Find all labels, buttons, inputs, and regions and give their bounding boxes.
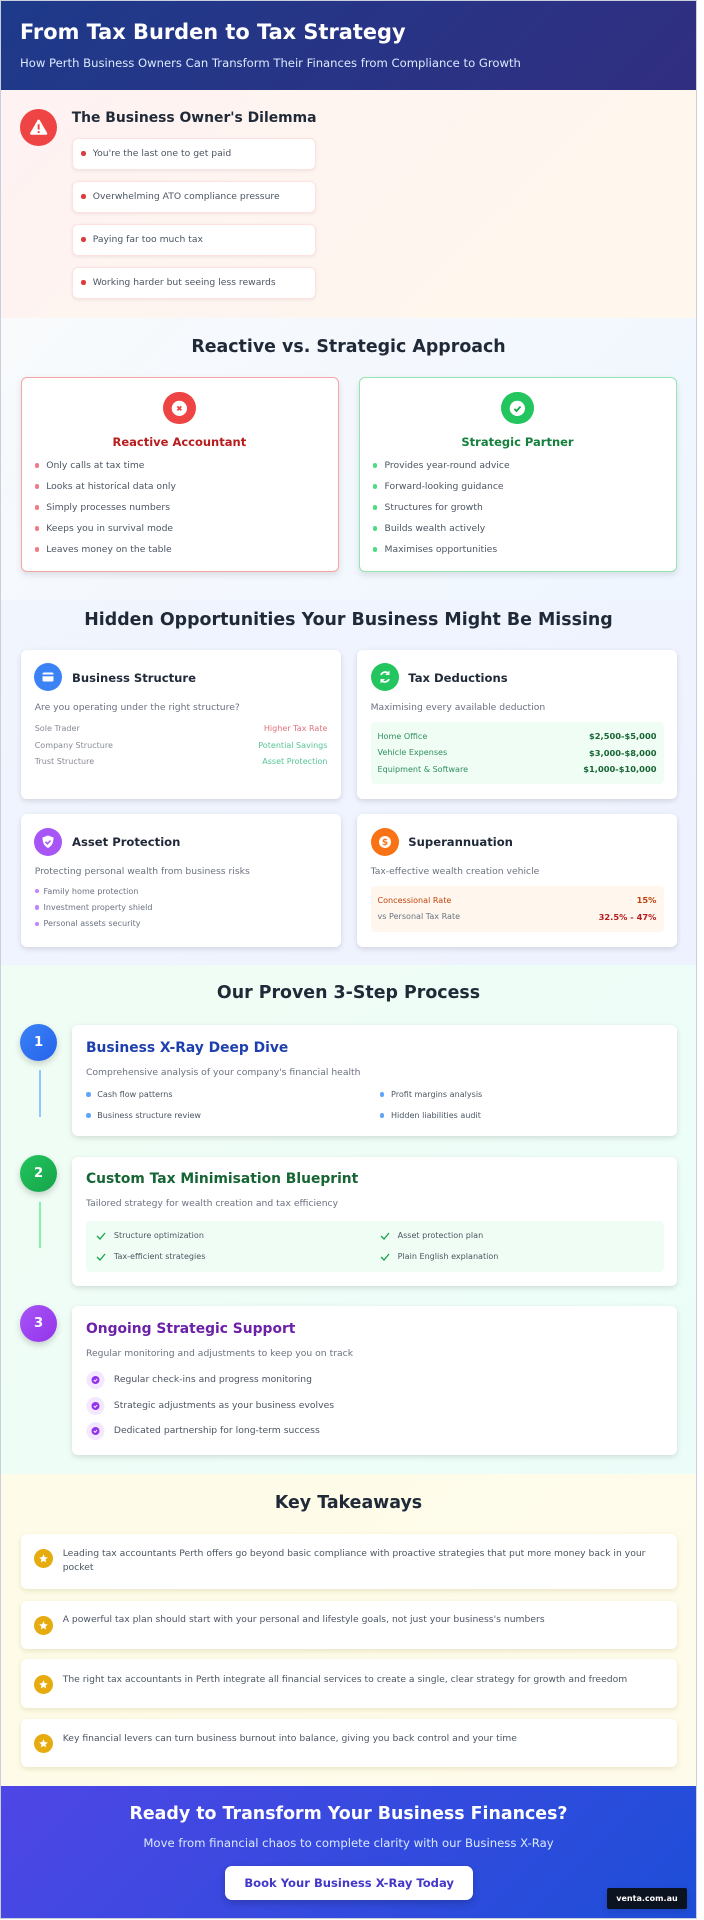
icon: dollar: $	[381, 838, 388, 848]
bullet list: Simply processes numbers	[46, 502, 170, 512]
card: tax deductions	[357, 650, 677, 798]
icon: star	[34, 1734, 53, 1752]
structure rows: Company Structure	[35, 741, 113, 750]
icon: credit card	[34, 663, 62, 691]
structure rows: Higher Tax Rate	[264, 724, 327, 733]
list item	[72, 181, 316, 213]
bullet list	[35, 886, 152, 928]
header banner	[1, 1, 696, 90]
feature list: Business structure review	[97, 1111, 201, 1120]
card: strategic partner	[359, 377, 677, 572]
feature list	[86, 1090, 482, 1120]
description: Tax-effective wealth creation vehicle	[371, 866, 539, 877]
title: From Tax Burden to Tax Strategy	[20, 20, 406, 44]
subtitle: How Perth Business Owners Can Transform Their Finances from Compliance to Growth	[20, 56, 521, 70]
step 2 marker	[20, 1155, 57, 1192]
card: reactive accountant	[21, 377, 339, 572]
bullet list: Builds wealth actively	[384, 522, 485, 534]
rates table: vs Personal Tax Rate	[378, 912, 460, 921]
deductions table: Equipment & Software	[378, 764, 468, 774]
rates table	[371, 886, 664, 932]
bullet list: Provides year-round advice	[384, 460, 510, 470]
takeaway text: Key financial levers can turn business burnout into balance, giving you back control and your time	[63, 1733, 517, 1744]
heading: Hidden Opportunities Your Business Might Be Missing	[84, 610, 613, 630]
structure rows: Trust Structure	[35, 757, 94, 766]
green checklist	[86, 1221, 664, 1272]
rates table: 15%	[637, 895, 656, 905]
deductions table: $2,500-$5,000	[589, 731, 656, 741]
card title: Business Structure	[72, 671, 196, 685]
structure rows: Asset Protection	[262, 757, 327, 766]
heading: Our Proven 3-Step Process	[217, 983, 480, 1003]
heading: The Business Owner's Dilemma	[72, 110, 316, 126]
deductions table	[371, 722, 664, 784]
step 3 marker: 3	[34, 1316, 43, 1331]
takeaway 2	[21, 1600, 677, 1649]
icon: warning triangle	[20, 109, 57, 146]
cta subtext: Move from financial chaos to complete clarity with our Business X-Ray	[143, 1836, 554, 1850]
list item	[72, 267, 316, 299]
rates table: Concessional Rate	[378, 896, 451, 904]
bullet list: Maximises opportunities	[384, 544, 497, 554]
support list: Regular check-ins and progress monitoring	[114, 1374, 312, 1385]
green checklist: Asset protection plan	[398, 1231, 483, 1240]
takeaway text: A powerful tax plan should start with your personal and lifestyle goals, not just your business's numbers	[63, 1614, 545, 1625]
feature list: Profit margins analysis	[391, 1090, 482, 1099]
rates table: 32.5% - 47%	[599, 912, 656, 922]
bullet list: Keeps you in survival mode	[46, 522, 173, 534]
icon: star	[34, 1616, 53, 1635]
bullet list: Leaves money on the table	[46, 544, 172, 554]
step 1 card	[72, 1025, 677, 1136]
list item: Working harder but seeing less rewards	[93, 277, 276, 288]
feature list: Hidden liabilities audit	[391, 1111, 481, 1120]
icon: cross	[163, 392, 196, 424]
step title: Custom Tax Minimisation Blueprint	[86, 1171, 358, 1187]
step 2 connector	[38, 1202, 40, 1248]
support list: Dedicated partnership for long-term success	[114, 1425, 320, 1436]
deductions table: Vehicle Expenses	[378, 748, 447, 757]
deductions table: $1,000-$10,000	[583, 764, 656, 774]
feature list: Cash flow patterns	[97, 1090, 173, 1099]
green checklist: Structure optimization	[114, 1231, 204, 1240]
description: Protecting personal wealth from business risks	[35, 866, 250, 877]
takeaway 4	[21, 1719, 677, 1767]
takeaway 1	[21, 1534, 677, 1589]
bullet list: Forward-looking guidance	[384, 480, 504, 492]
bullet list	[35, 460, 176, 554]
website badge: venta.com.au	[616, 1894, 678, 1903]
cta button: Book Your Business X-Ray Today	[244, 1876, 454, 1890]
card: superannuation	[357, 814, 677, 947]
panel: hidden opportunities	[1, 600, 696, 965]
card title: Strategic Partner	[461, 434, 574, 448]
icon: star	[34, 1674, 53, 1694]
step description: Tailored strategy for wealth creation and tax efficiency	[86, 1198, 338, 1209]
panel: reactive vs strategic	[1, 318, 696, 600]
step 3 card	[72, 1306, 677, 1455]
cta heading: Ready to Transform Your Business Finances?	[129, 1804, 568, 1824]
takeaway text: Leading tax accountants Perth offers go beyond basic compliance with proactive strategies that put more money back in your pocket	[63, 1548, 645, 1573]
icon: shield	[34, 828, 62, 856]
list item: You're the last one to get paid	[93, 148, 231, 159]
bullet list: Looks at historical data only	[46, 480, 176, 492]
card title: Superannuation	[408, 835, 513, 849]
green checklist: Tax-efficient strategies	[114, 1252, 205, 1261]
takeaway 3	[21, 1659, 677, 1708]
list item	[72, 224, 316, 256]
step 3 marker	[20, 1305, 57, 1342]
bullet list: Structures for growth	[384, 502, 483, 512]
support list	[86, 1371, 334, 1440]
deductions table: Home Office	[378, 732, 427, 740]
step title: Ongoing Strategic Support	[86, 1321, 295, 1337]
icon: sync	[371, 663, 399, 691]
list item: Overwhelming ATO compliance pressure	[93, 191, 280, 202]
step description: Comprehensive analysis of your company's financial health	[86, 1067, 361, 1078]
structure rows	[34, 724, 327, 766]
list item: Paying far too much tax	[93, 234, 203, 245]
green checklist: Plain English explanation	[398, 1252, 498, 1261]
cta button	[225, 1866, 473, 1900]
panel: the business owner's dilemma	[1, 90, 696, 318]
step description: Regular monitoring and adjustments to keep you on track	[86, 1348, 353, 1359]
bullet list: Only calls at tax time	[46, 460, 144, 470]
description: Are you operating under the right structure?	[35, 702, 240, 712]
card title: Reactive Accountant	[112, 434, 246, 448]
website badge	[607, 1888, 687, 1909]
step title: Business X-Ray Deep Dive	[86, 1040, 288, 1056]
heading: Reactive vs. Strategic Approach	[191, 337, 506, 357]
takeaway text: The right tax accountants in Perth integrate all financial services to create a single, clear strategy for growth and freedom	[63, 1674, 627, 1684]
list item	[72, 138, 316, 170]
panel: key takeaways	[1, 1474, 696, 1786]
description: Maximising every available deduction	[371, 702, 545, 712]
structure rows: Potential Savings	[258, 741, 327, 750]
card title: Asset Protection	[72, 835, 180, 849]
step 2 card	[72, 1157, 677, 1286]
icon: star	[34, 1549, 53, 1568]
structure rows: Sole Trader	[35, 724, 80, 733]
step 1 marker	[20, 1024, 57, 1061]
bullet list	[373, 460, 510, 554]
bullet list: Family home protection	[43, 886, 138, 896]
heading: Key Takeaways	[275, 1493, 422, 1513]
call to action banner	[1, 1786, 696, 1919]
step 1 marker: 1	[34, 1035, 43, 1050]
step 2 marker: 2	[34, 1166, 43, 1181]
card: business structure	[21, 650, 341, 798]
panel: 3-step process	[1, 965, 696, 1474]
bullet list: Personal assets security	[43, 919, 141, 928]
step 1 connector	[38, 1070, 40, 1117]
icon: check	[501, 392, 534, 424]
card: asset protection	[21, 814, 341, 947]
card title: Tax Deductions	[408, 671, 508, 685]
deductions table: $3,000-$8,000	[589, 748, 656, 758]
support list: Strategic adjustments as your business evolves	[114, 1400, 334, 1410]
icon: dollar	[371, 828, 399, 856]
bullet list: Investment property shield	[43, 903, 152, 912]
